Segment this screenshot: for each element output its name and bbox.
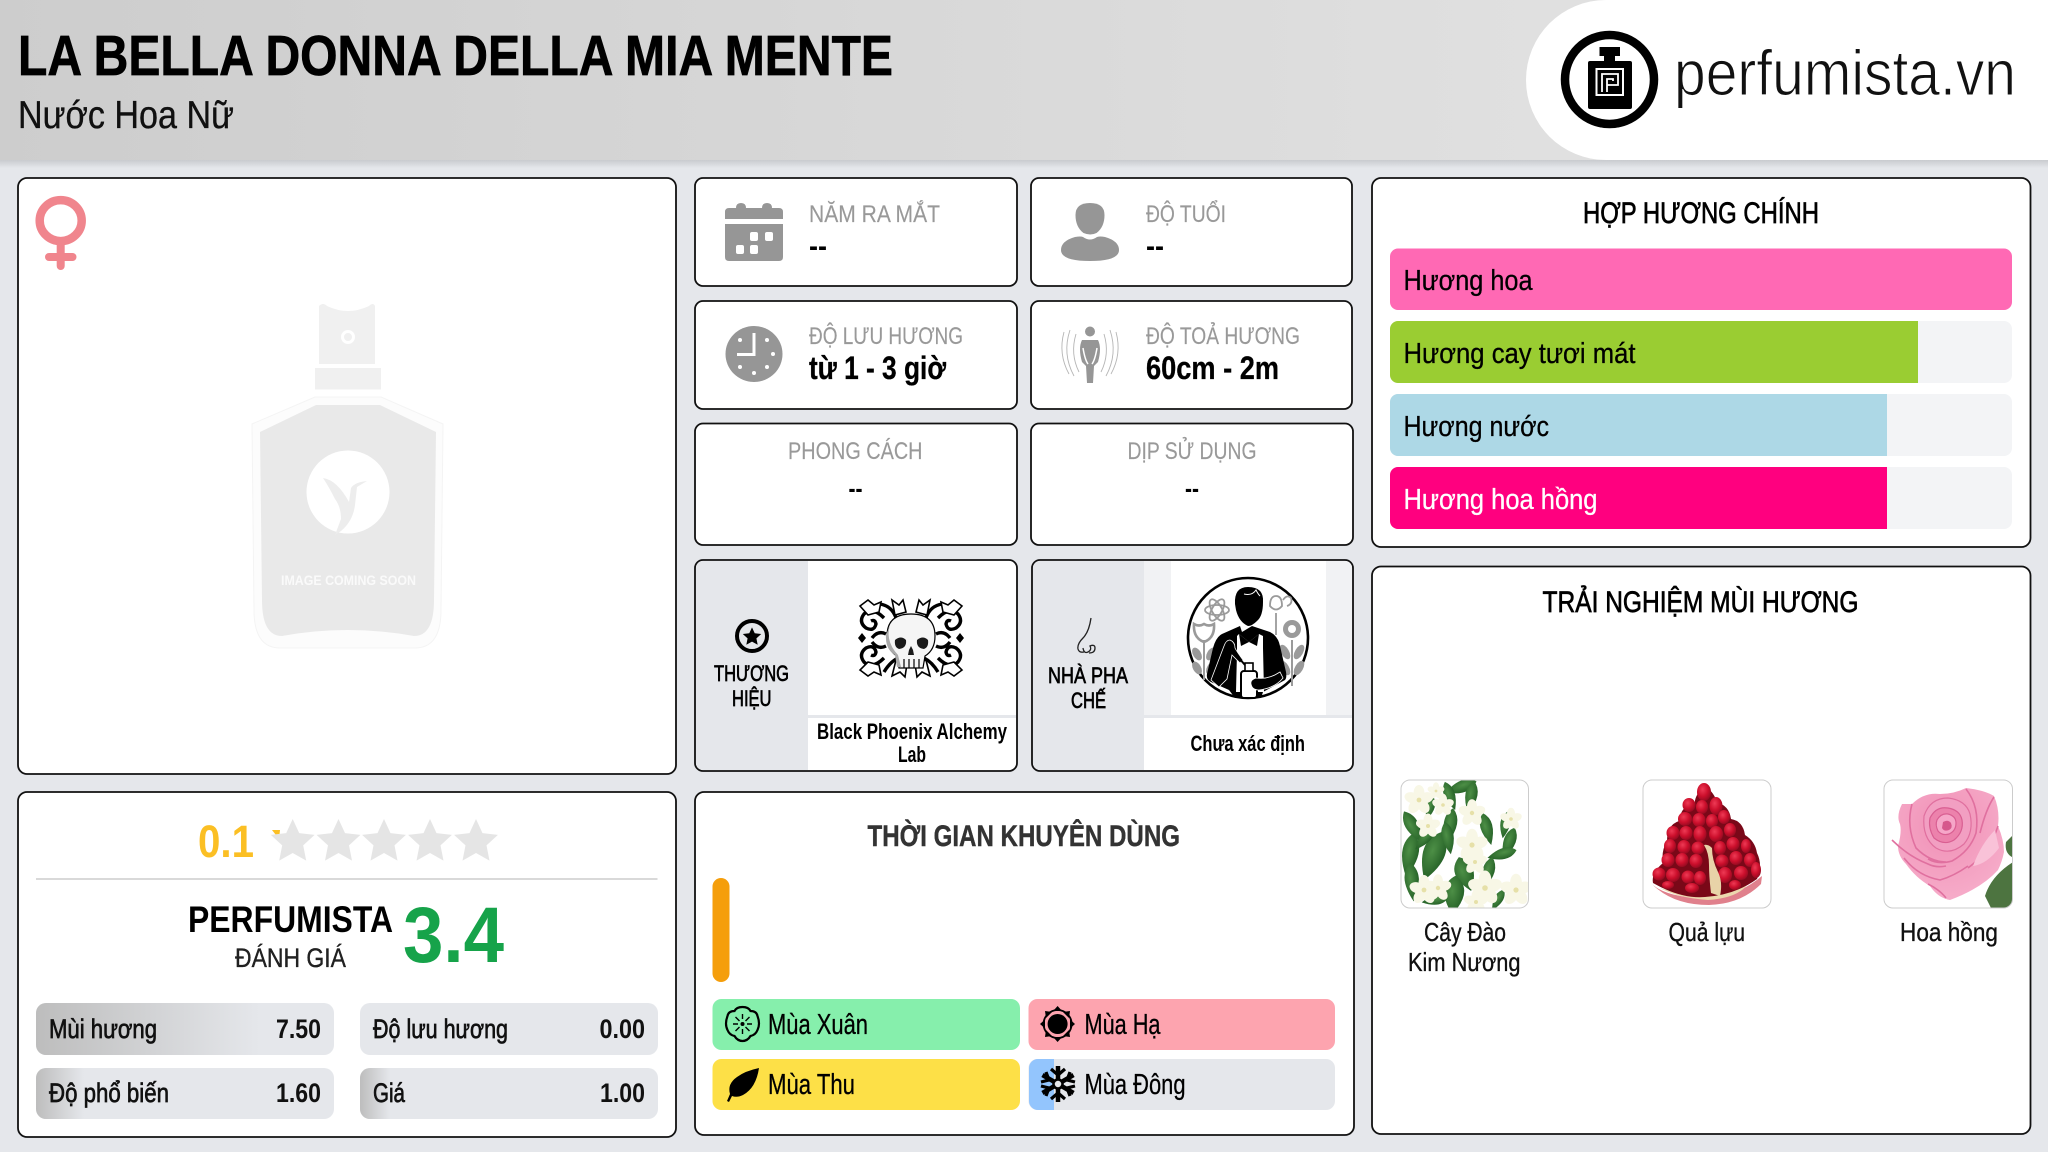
score: longevity: 0.00 bbox=[600, 1014, 645, 1044]
icon: female symbol bbox=[40, 200, 82, 266]
score: price bbox=[360, 1068, 658, 1119]
season: autumn: Mùa Thu bbox=[768, 1069, 855, 1101]
placeholder bottle: IMAGE COMING SOON bbox=[281, 572, 416, 588]
card: perfumer bbox=[1032, 560, 1353, 771]
icon: person with aura bbox=[1062, 326, 1118, 383]
perfumer illustration bbox=[1188, 578, 1308, 698]
accord bar: rose bbox=[1390, 467, 2012, 529]
card: style bbox=[695, 424, 1017, 545]
score: scent: 7.50 bbox=[276, 1014, 321, 1044]
label: NĂM RA MẮT bbox=[809, 200, 940, 228]
brand wordmark: perfumista.vn bbox=[1674, 37, 2016, 109]
label: ĐỘ TUỔI bbox=[1146, 200, 1226, 228]
brand name: Black Phoenix Alchemy bbox=[817, 719, 1008, 744]
accord bar: fresh spicy bbox=[1390, 321, 2012, 383]
card: occasion bbox=[1031, 424, 1353, 545]
logo block bbox=[1526, 0, 2048, 160]
brand logo: skull ornament bbox=[858, 600, 964, 677]
perfumista score: 3.4 bbox=[403, 890, 504, 979]
leaves bbox=[1402, 780, 1517, 908]
icon: calendar bbox=[725, 203, 783, 261]
icon: person bbox=[1061, 203, 1119, 261]
card: projection bbox=[1031, 301, 1352, 409]
heading: THỜI GIAN KHUYÊN DÙNG bbox=[868, 819, 1180, 853]
label: PHONG CÁCH bbox=[788, 438, 922, 465]
brand name: Lab bbox=[898, 742, 926, 767]
score: popularity: 1.60 bbox=[276, 1078, 321, 1108]
botanical decoration bbox=[1190, 596, 1306, 686]
season: autumn bbox=[712, 1059, 1020, 1110]
score: longevity: Độ lưu hương bbox=[373, 1014, 508, 1044]
note: mock orange bbox=[1398, 776, 1533, 977]
subtitle: Nước Hoa Nữ bbox=[18, 94, 234, 137]
icon: snowflake bbox=[1041, 1066, 1075, 1102]
chemist figure bbox=[1207, 587, 1286, 698]
label: ĐỘ TOẢ HƯƠNG bbox=[1146, 321, 1300, 350]
icon: clock bbox=[726, 326, 782, 382]
score: scent: Mùi hương bbox=[49, 1014, 157, 1044]
label: perfumer: CHẾ bbox=[1071, 688, 1106, 713]
season: winter bbox=[1028, 1059, 1335, 1110]
note: rose: Hoa hồng bbox=[1900, 917, 1998, 947]
label: ĐỘ LƯU HƯƠNG bbox=[809, 322, 963, 350]
note: rose bbox=[1884, 780, 2014, 947]
value: -- bbox=[1146, 230, 1164, 263]
accord bar: rose: Hương hoa hồng bbox=[1404, 484, 1598, 516]
season: spring: Mùa Xuân bbox=[768, 1009, 868, 1041]
card: release year bbox=[695, 178, 1017, 286]
card: age bbox=[1031, 178, 1352, 286]
score: price: 1.00 bbox=[600, 1078, 645, 1108]
value: -- bbox=[848, 473, 862, 503]
note: mock orange: Kim Nương bbox=[1408, 947, 1520, 977]
panel: scent experience bbox=[1372, 566, 2030, 1134]
accord bar: aquatic bbox=[1390, 394, 2012, 456]
value: -- bbox=[1185, 473, 1199, 503]
perfumista label: PERFUMISTA bbox=[188, 899, 393, 940]
accord bar: aquatic: Hương nước bbox=[1404, 411, 1549, 443]
arils bbox=[1652, 783, 1761, 893]
value: 60cm - 2m bbox=[1146, 350, 1279, 386]
flowers bbox=[1404, 782, 1528, 908]
score: scent bbox=[36, 1003, 334, 1055]
panel: ratings bbox=[18, 792, 676, 1137]
label: perfumer: NHÀ PHA bbox=[1048, 663, 1128, 688]
label: brand: THƯƠNG bbox=[714, 661, 789, 686]
icon: nose bbox=[1078, 618, 1095, 653]
season: winter: Mùa Đông bbox=[1084, 1069, 1186, 1101]
note: pomegranate: Quả lựu bbox=[1668, 917, 1745, 947]
note: pomegranate bbox=[1643, 780, 1771, 947]
heading: TRẢI NGHIỆM MÙI HƯƠNG bbox=[1542, 585, 1858, 619]
icon: leaf bbox=[727, 1068, 759, 1102]
day time bar bbox=[712, 878, 730, 982]
perfumer name: Chưa xác định bbox=[1190, 731, 1305, 756]
label: brand: HIỆU bbox=[732, 686, 772, 711]
score: longevity bbox=[360, 1003, 658, 1055]
score: popularity: Độ phổ biến bbox=[49, 1078, 169, 1108]
perfumista label bbox=[188, 899, 393, 973]
season: summer bbox=[1028, 999, 1335, 1050]
panel: product image bbox=[18, 178, 676, 774]
accord bar: fresh spicy: Hương cay tươi mát bbox=[1404, 338, 1636, 370]
user rating number: 0.1 bbox=[198, 816, 254, 867]
note: mock orange: Cây Đào bbox=[1424, 917, 1506, 947]
panel: main accords bbox=[1372, 178, 2030, 547]
card: brand bbox=[695, 560, 1017, 771]
value: -- bbox=[809, 230, 827, 263]
title: LA BELLA DONNA DELLA MIA MENTE bbox=[18, 24, 893, 88]
icon: perfume bottle logo bbox=[1565, 35, 1654, 124]
accord bar: floral: Hương hoa bbox=[1404, 265, 1533, 297]
icon: star badge bbox=[737, 621, 767, 651]
heading: HỢP HƯƠNG CHÍNH bbox=[1583, 197, 1819, 230]
icon: sun bbox=[1040, 1006, 1075, 1042]
placeholder bottle bbox=[252, 304, 443, 648]
label: perfumer bbox=[1048, 663, 1128, 713]
season: summer: Mùa Hạ bbox=[1084, 1009, 1161, 1041]
score: popularity bbox=[36, 1068, 334, 1119]
header band bbox=[0, 0, 2048, 168]
season: spring bbox=[712, 999, 1020, 1050]
label: brand bbox=[714, 661, 789, 711]
score: price: Giá bbox=[373, 1078, 406, 1108]
label: DỊP SỬ DỤNG bbox=[1128, 436, 1256, 465]
star rating row bbox=[271, 819, 498, 861]
perfumista label: ĐÁNH GIÁ bbox=[235, 943, 346, 973]
card: longevity bbox=[695, 301, 1017, 409]
value: từ 1 - 3 giờ bbox=[809, 350, 946, 386]
accord bar: floral bbox=[1390, 248, 2012, 310]
icon: flower bbox=[726, 1007, 759, 1041]
brand name bbox=[817, 719, 1008, 767]
panel: recommended time bbox=[695, 792, 1354, 1135]
